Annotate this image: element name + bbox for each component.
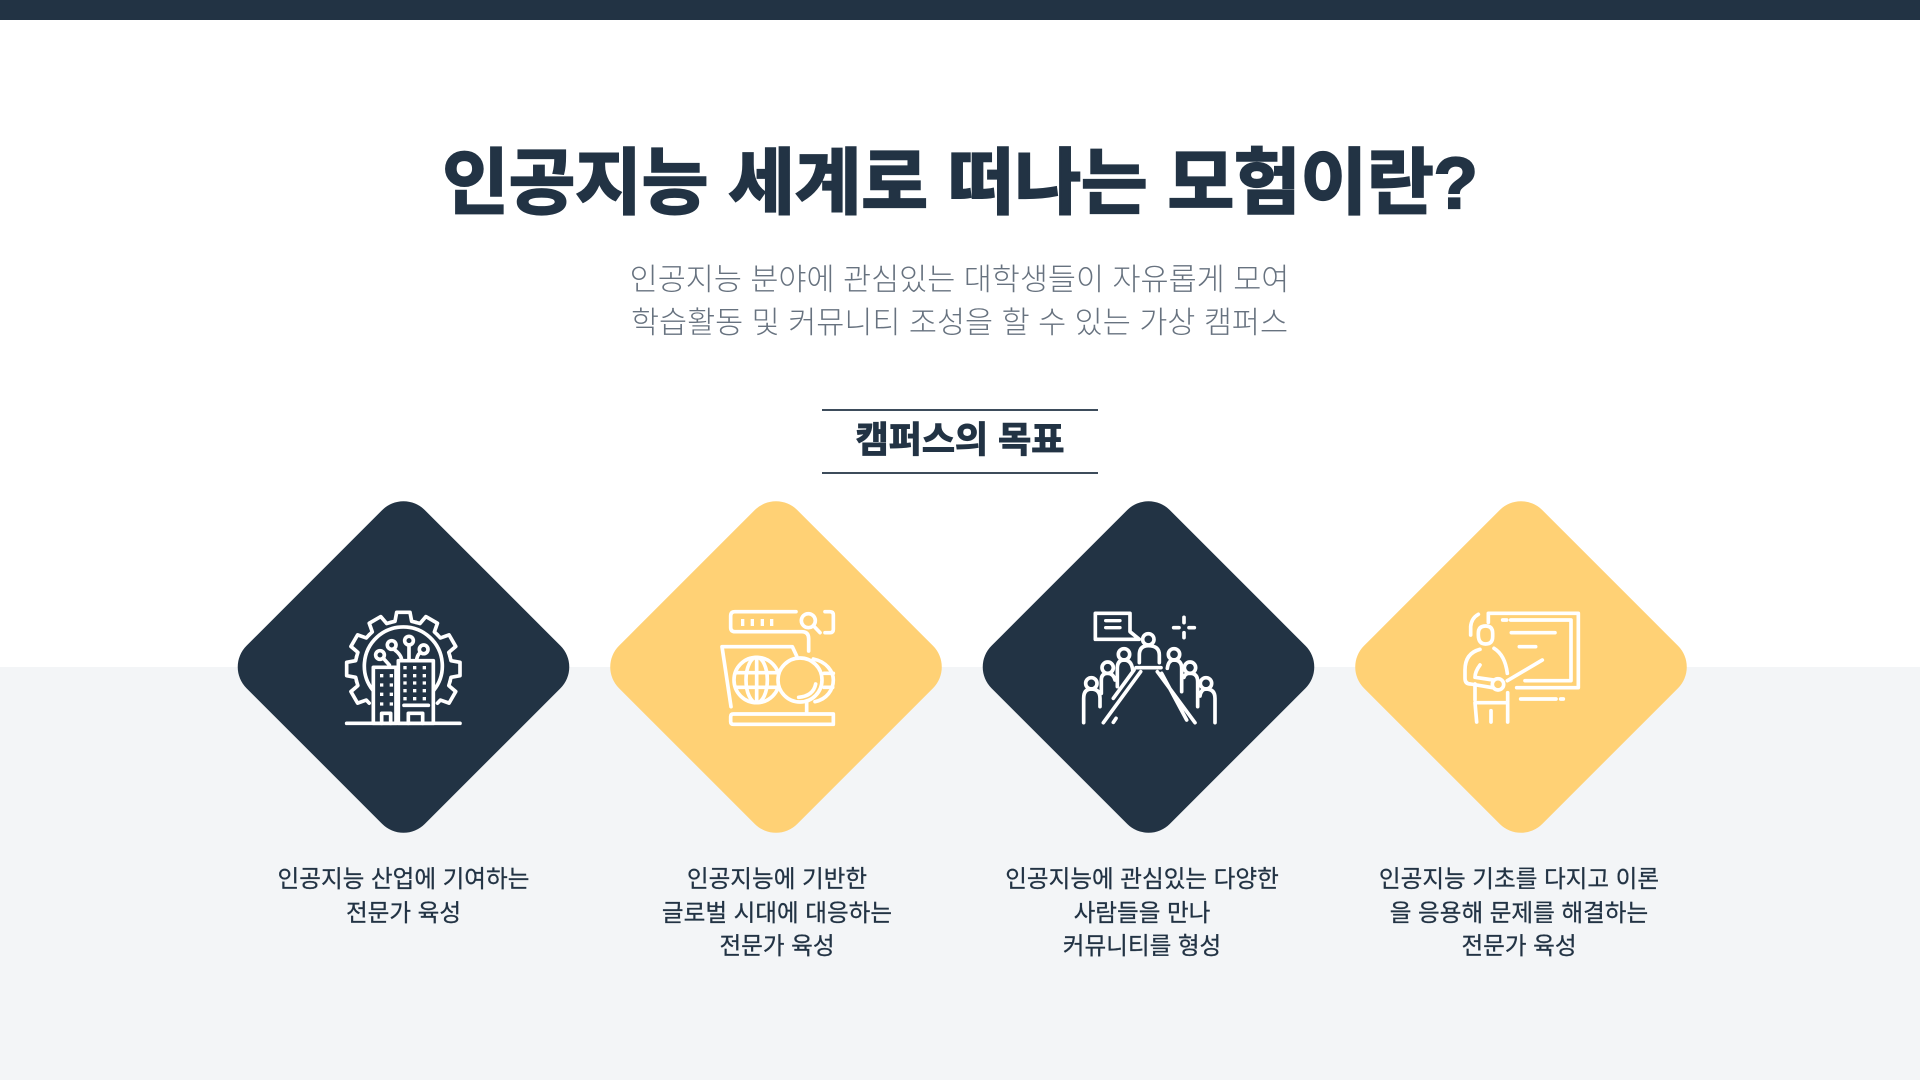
- caption 3: 커뮤니티를 형성: [1063, 934, 1221, 960]
- subtitle: 학습활동 및 커뮤니티 조성을 할 수 있는 가상 캠퍼스: [631, 306, 1288, 340]
- diamond 3: [970, 489, 1327, 845]
- caption 1: [278, 866, 529, 927]
- caption 3: [1005, 866, 1279, 960]
- diamond 4: [1343, 489, 1699, 845]
- caption 1: 전문가 육성: [346, 901, 461, 927]
- caption 3: 사람들을 만나: [1074, 901, 1210, 927]
- title: 인공지능 세계로 떠나는 모험이란?: [442, 144, 1478, 224]
- icon: globe and magnifier on laptop: [722, 612, 833, 724]
- caption 4: 을 응용해 문제를 해결하는: [1390, 901, 1648, 927]
- section heading: campus goals: 캠퍼스의 목표: [856, 419, 1064, 460]
- caption 2: 전문가 육성: [719, 934, 835, 960]
- icon: meeting table with people: [1084, 613, 1215, 723]
- caption 2: 글로벌 시대에 대응하는: [662, 901, 892, 927]
- caption 1: 인공지능 산업에 기여하는: [278, 867, 529, 893]
- caption 2: [662, 866, 892, 960]
- subtitle: [630, 262, 1289, 340]
- top bar: [0, 0, 1920, 20]
- lower background band: [0, 667, 1920, 1080]
- caption 4: 전문가 육성: [1461, 934, 1577, 960]
- icon: gear and buildings: [347, 612, 460, 723]
- diamond 1: [225, 489, 582, 845]
- diamond 2: [598, 489, 954, 845]
- caption 2: 인공지능에 기반한: [687, 867, 867, 893]
- caption 4: 인공지능 기초를 다지고 이론: [1379, 867, 1659, 893]
- caption 4: [1379, 866, 1659, 960]
- caption 3: 인공지능에 관심있는 다양한: [1005, 867, 1279, 893]
- icon: teacher at board: [1465, 613, 1578, 722]
- subtitle: 인공지능 분야에 관심있는 대학생들이 자유롭게 모여: [630, 262, 1289, 296]
- section heading: campus goals: [822, 409, 1098, 474]
